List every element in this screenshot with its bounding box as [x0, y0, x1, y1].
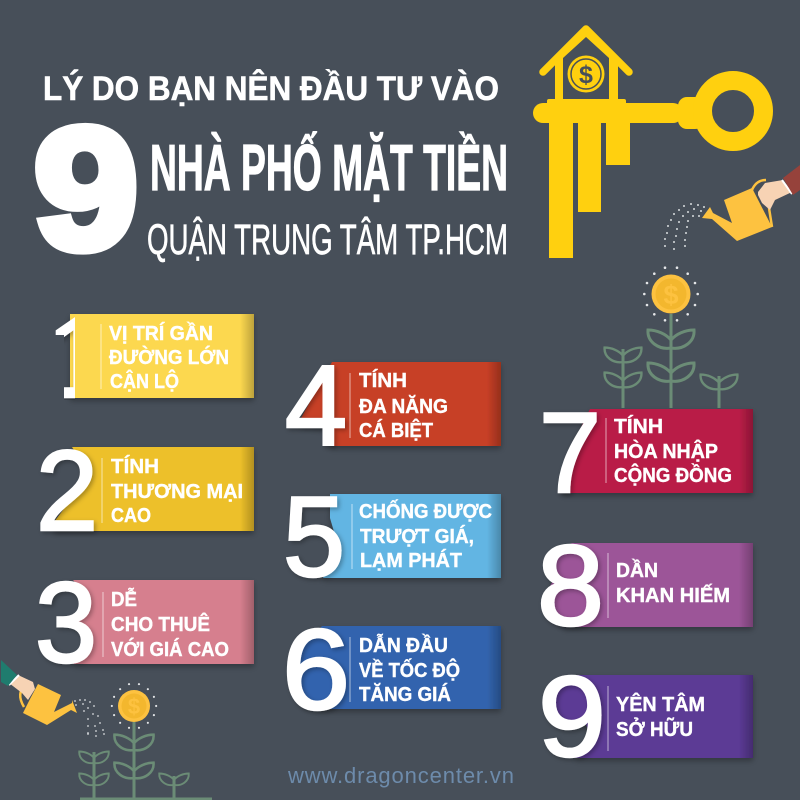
big number 9: 9	[34, 93, 138, 285]
plants and coin left: $	[128, 694, 140, 719]
number 3: 3	[35, 560, 97, 687]
label 1: VỊ TRÍ GẦN	[109, 322, 213, 345]
title line 2: NHÀ PHỐ MẶT TIỀN	[150, 131, 508, 204]
item 5	[283, 474, 501, 601]
label 5	[359, 499, 492, 572]
title line 3: QUẬN TRUNG TÂM TP.HCM	[147, 216, 508, 264]
label 5: TRƯỢT GIÁ,	[360, 525, 474, 548]
label 9	[616, 692, 705, 741]
label 6: TĂNG GIÁ	[359, 683, 451, 706]
label 1: ĐƯỜNG LỚN	[109, 345, 229, 369]
ribbon 9	[552, 675, 753, 758]
number 8: 8	[537, 523, 604, 650]
label 3: VỚI GIÁ CAO	[111, 637, 229, 661]
label 8: KHAN HIẾM	[616, 584, 730, 607]
label 1: CẬN LỘ	[110, 369, 179, 393]
label 5: CHỐNG ĐƯỢC	[359, 499, 492, 523]
water droplets right	[664, 203, 705, 250]
item 8	[537, 523, 753, 650]
icon: watering can right	[702, 165, 800, 241]
label 7: TÍNH	[614, 415, 663, 438]
ribbon 4	[300, 362, 501, 446]
ribbon 7	[562, 409, 753, 493]
item 3	[35, 560, 254, 687]
title line 1: LÝ DO BẠN NÊN ĐẦU TƯ VÀO	[43, 70, 499, 108]
label 4: ĐA NĂNG	[359, 395, 448, 418]
label 2: TÍNH	[111, 455, 159, 478]
number 7: 7	[539, 390, 601, 517]
website url: www.dragoncenter.vn	[287, 763, 514, 788]
title	[34, 70, 508, 285]
item 2	[36, 428, 254, 555]
label 4: CÁ BIỆT	[359, 418, 433, 442]
label 3	[111, 588, 229, 661]
plants and coin right: $	[663, 280, 679, 310]
label 9: SỞ HỮU	[616, 717, 693, 741]
ribbon 8	[548, 543, 753, 627]
plants and coin left	[79, 683, 212, 799]
number 5: 5	[283, 474, 345, 601]
item 6	[282, 607, 501, 734]
label 6: VỀ TỐC ĐỘ	[359, 658, 460, 682]
label 8	[616, 559, 730, 607]
label 4: TÍNH	[359, 369, 407, 392]
item 9	[538, 654, 753, 781]
water droplets left	[74, 699, 105, 737]
ribbon 5	[323, 494, 501, 578]
number 4: 4	[285, 343, 347, 470]
item 1	[56, 314, 256, 402]
ribbon 6	[293, 626, 501, 709]
label 5: LẠM PHÁT	[360, 549, 462, 572]
ribbon 3	[72, 580, 254, 664]
label 3: DỄ	[111, 588, 137, 611]
label 6: DẪN ĐẦU	[359, 634, 448, 657]
label 2: THƯƠNG MẠI	[111, 481, 243, 503]
icon: house key: $	[579, 61, 593, 89]
number 9: 9	[538, 654, 606, 781]
plants and coin right	[605, 266, 737, 408]
item 4	[285, 343, 501, 470]
item 7	[539, 390, 753, 517]
label 7	[614, 415, 732, 487]
label 8: DẦN	[616, 559, 658, 582]
number 6: 6	[282, 607, 350, 734]
icon: watering can left	[1, 660, 77, 725]
number 1: 1	[46, 295, 109, 422]
label 7: HÒA NHẬP	[614, 439, 718, 463]
label 2	[111, 455, 243, 527]
label 7: CỘNG ĐỒNG	[614, 463, 732, 487]
label 9: YÊN TÂM	[616, 692, 705, 716]
label 1	[109, 322, 229, 393]
ribbon 1	[70, 314, 254, 398]
label 2: CAO	[111, 505, 151, 527]
label 3: CHO THUÊ	[111, 612, 210, 636]
ribbon 2	[54, 447, 254, 531]
label 6	[359, 634, 460, 706]
icon: house key	[533, 29, 764, 258]
label 4	[359, 369, 448, 442]
number 2: 2	[36, 428, 98, 555]
